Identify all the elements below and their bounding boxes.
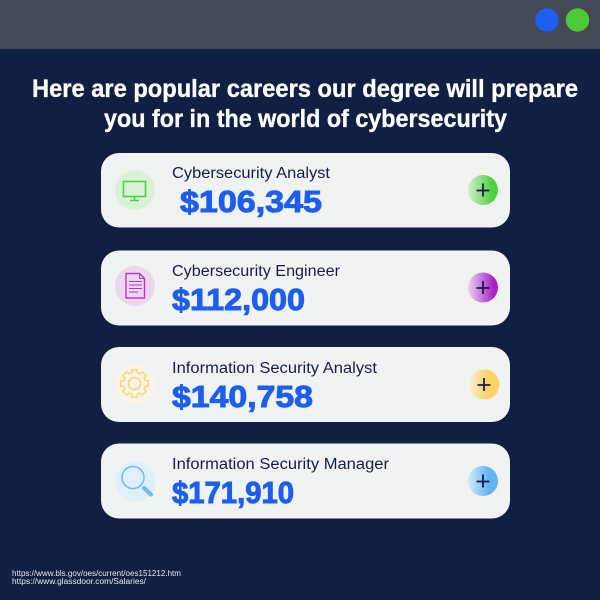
source links: https://www.glassdoor.com/Salaries/ [12, 577, 147, 586]
icon: gear [115, 364, 155, 404]
icon: document [115, 266, 155, 306]
job title: Information Security Analyst [172, 360, 378, 377]
panel: Cybersecurity Engineer [101, 250, 510, 326]
source links [12, 569, 181, 586]
icon: magnifier [116, 462, 156, 502]
title [32, 75, 578, 133]
source links: https://www.bls.gov/oes/current/oes151212.htm [12, 569, 181, 578]
green dot [566, 8, 589, 32]
job title: Information Security Manager [172, 456, 389, 473]
job title: Cybersecurity Analyst [172, 165, 331, 182]
icon: monitor [115, 170, 155, 210]
title: Here are popular careers our degree will prepare [32, 75, 578, 103]
salary: $106,345 [180, 184, 322, 219]
plus button [470, 370, 500, 400]
panel: Information Security Manager [101, 444, 510, 518]
panel: Cybersecurity Analyst [101, 153, 510, 228]
plus button [468, 466, 498, 496]
blue dot [535, 8, 559, 32]
plus button [468, 175, 498, 205]
panel: Information Security Analyst [101, 347, 510, 422]
plus button [468, 272, 498, 302]
salary: $140,758 [172, 379, 313, 414]
job title: Cybersecurity Engineer [172, 263, 340, 280]
title: you for in the world of cybersecurity [104, 105, 507, 133]
salary: $112,000 [172, 282, 305, 317]
top bar [0, 0, 600, 49]
salary: $171,910 [172, 475, 294, 510]
